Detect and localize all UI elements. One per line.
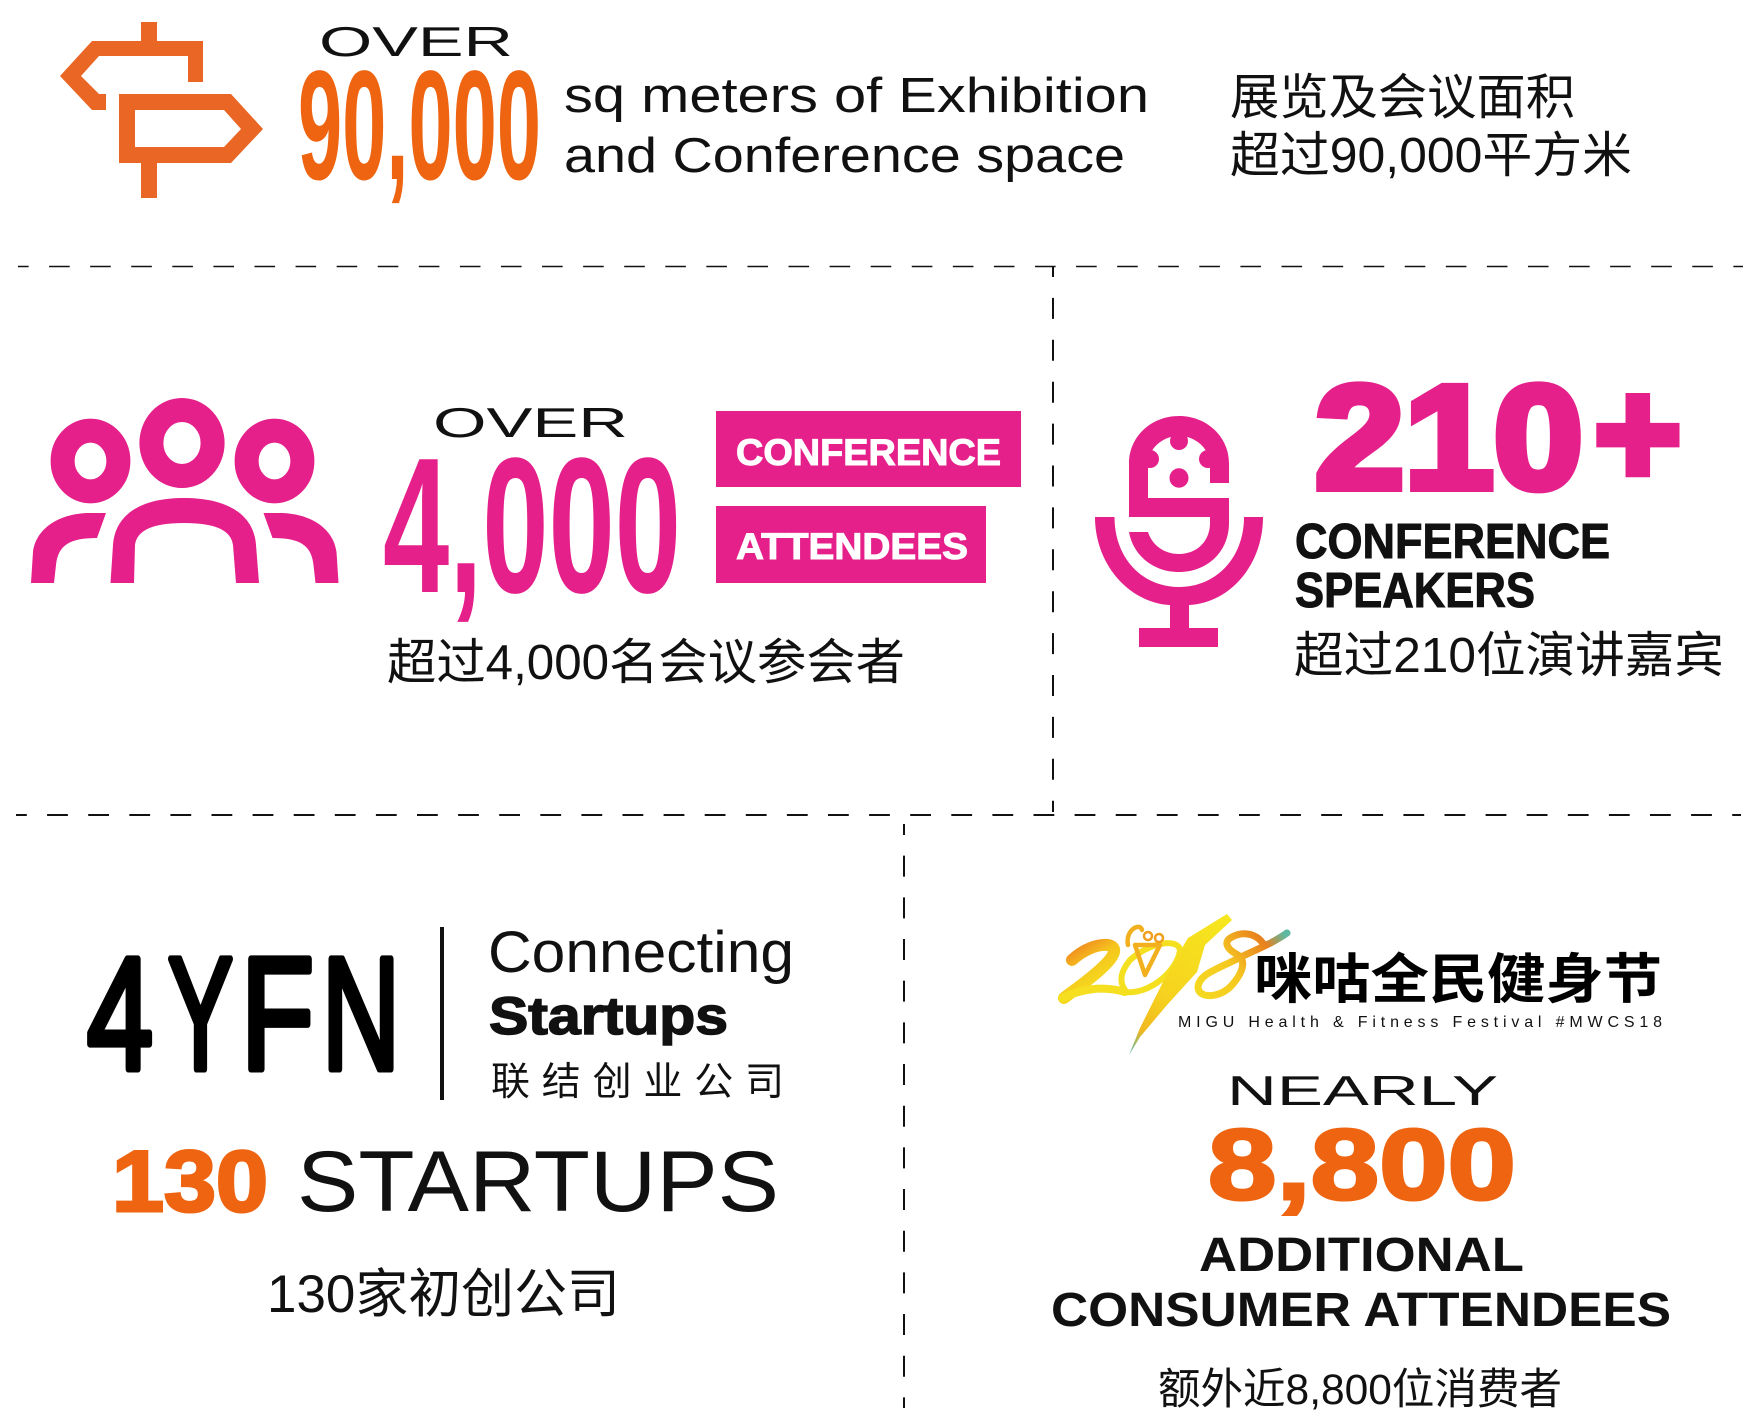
number: 210+: 210 <box>1315 356 1583 520</box>
heading: additional consumer attendees <box>1051 1229 1671 1337</box>
text: connecting startups <box>488 920 794 1104</box>
number: 8,800: 8,800 <box>1208 1109 1516 1221</box>
label: over: OVER <box>319 18 513 65</box>
panel: conference speakers <box>1095 349 1724 683</box>
icon: signpost <box>60 22 263 198</box>
text: chinese exhibition description: 超过90,000平方米 <box>1230 129 1632 183</box>
icon: microphone <box>1095 416 1263 647</box>
logo: 4YFN: Y <box>168 924 233 1103</box>
heading: additional consumer attendees: ADDITIONAL <box>1199 1229 1524 1282</box>
logo: festival tagline: MIGU Health & Fitness Festival #MWCS18 <box>1178 1014 1662 1031</box>
logo: festival name: 咪咕全民健身节 <box>1254 950 1662 1010</box>
panel: 4YFN startups <box>87 920 794 1324</box>
text: exhibition description: and Conference space <box>564 129 1125 183</box>
number: 4,000: 4,000 <box>383 417 681 633</box>
badge: conference: CONFERENCE <box>736 432 1001 473</box>
badge: attendees <box>716 506 986 583</box>
panel: conference attendees <box>31 399 1021 690</box>
text: connecting startups: Connecting <box>488 920 794 985</box>
number: 130 startups: 130 <box>112 1134 268 1230</box>
logo: 4YFN: F <box>241 924 314 1103</box>
heading: conference speakers <box>1295 515 1610 618</box>
heading: additional consumer attendees: CONSUMER ATTENDEES <box>1051 1284 1671 1337</box>
text: connecting startups: Startups <box>489 987 728 1046</box>
text: chinese speakers: 超过210位演讲嘉宾 <box>1294 629 1724 683</box>
badge: conference <box>716 411 1021 487</box>
text: exhibition description: sq meters of Exhibition <box>564 69 1149 123</box>
number: 130 startups <box>112 1134 779 1230</box>
label: nearly: NEARLY <box>1227 1067 1498 1114</box>
text: chinese attendees: 超过4,000名会议参会者 <box>387 636 905 690</box>
logo: 4YFN: N <box>322 924 400 1103</box>
text: chinese startups: 130家初创公司 <box>267 1265 620 1324</box>
logo: 2018 calligraphy <box>1062 914 1287 1055</box>
divider: logo bar <box>440 927 444 1100</box>
number: 90,000: 90,000 <box>298 39 541 213</box>
text: chinese exhibition description: 展览及会议面积 <box>1230 71 1575 125</box>
heading: conference speakers: SPEAKERS <box>1295 564 1535 618</box>
icon: three people <box>31 410 338 583</box>
text: chinese consumer attendees: 额外近8,800位消费者 <box>1158 1366 1562 1414</box>
number: 130 startups: STARTUPS <box>297 1134 779 1230</box>
badge: attendees: ATTENDEES <box>736 526 968 567</box>
heading: conference speakers: CONFERENCE <box>1295 515 1610 569</box>
text: chinese exhibition description <box>1230 71 1632 183</box>
logo: 4YFN: 4 <box>87 924 153 1103</box>
panel: MIGU consumer attendees <box>1051 914 1671 1414</box>
text: exhibition description <box>564 69 1149 183</box>
text: connecting startups: 联结创业公司 <box>491 1061 784 1104</box>
logo: 4YFN <box>87 924 400 1103</box>
panel: exhibition space <box>60 18 1632 213</box>
number: 210+: + <box>1594 349 1682 517</box>
number: 210+ <box>1315 349 1682 520</box>
label: over: OVER <box>433 399 628 446</box>
